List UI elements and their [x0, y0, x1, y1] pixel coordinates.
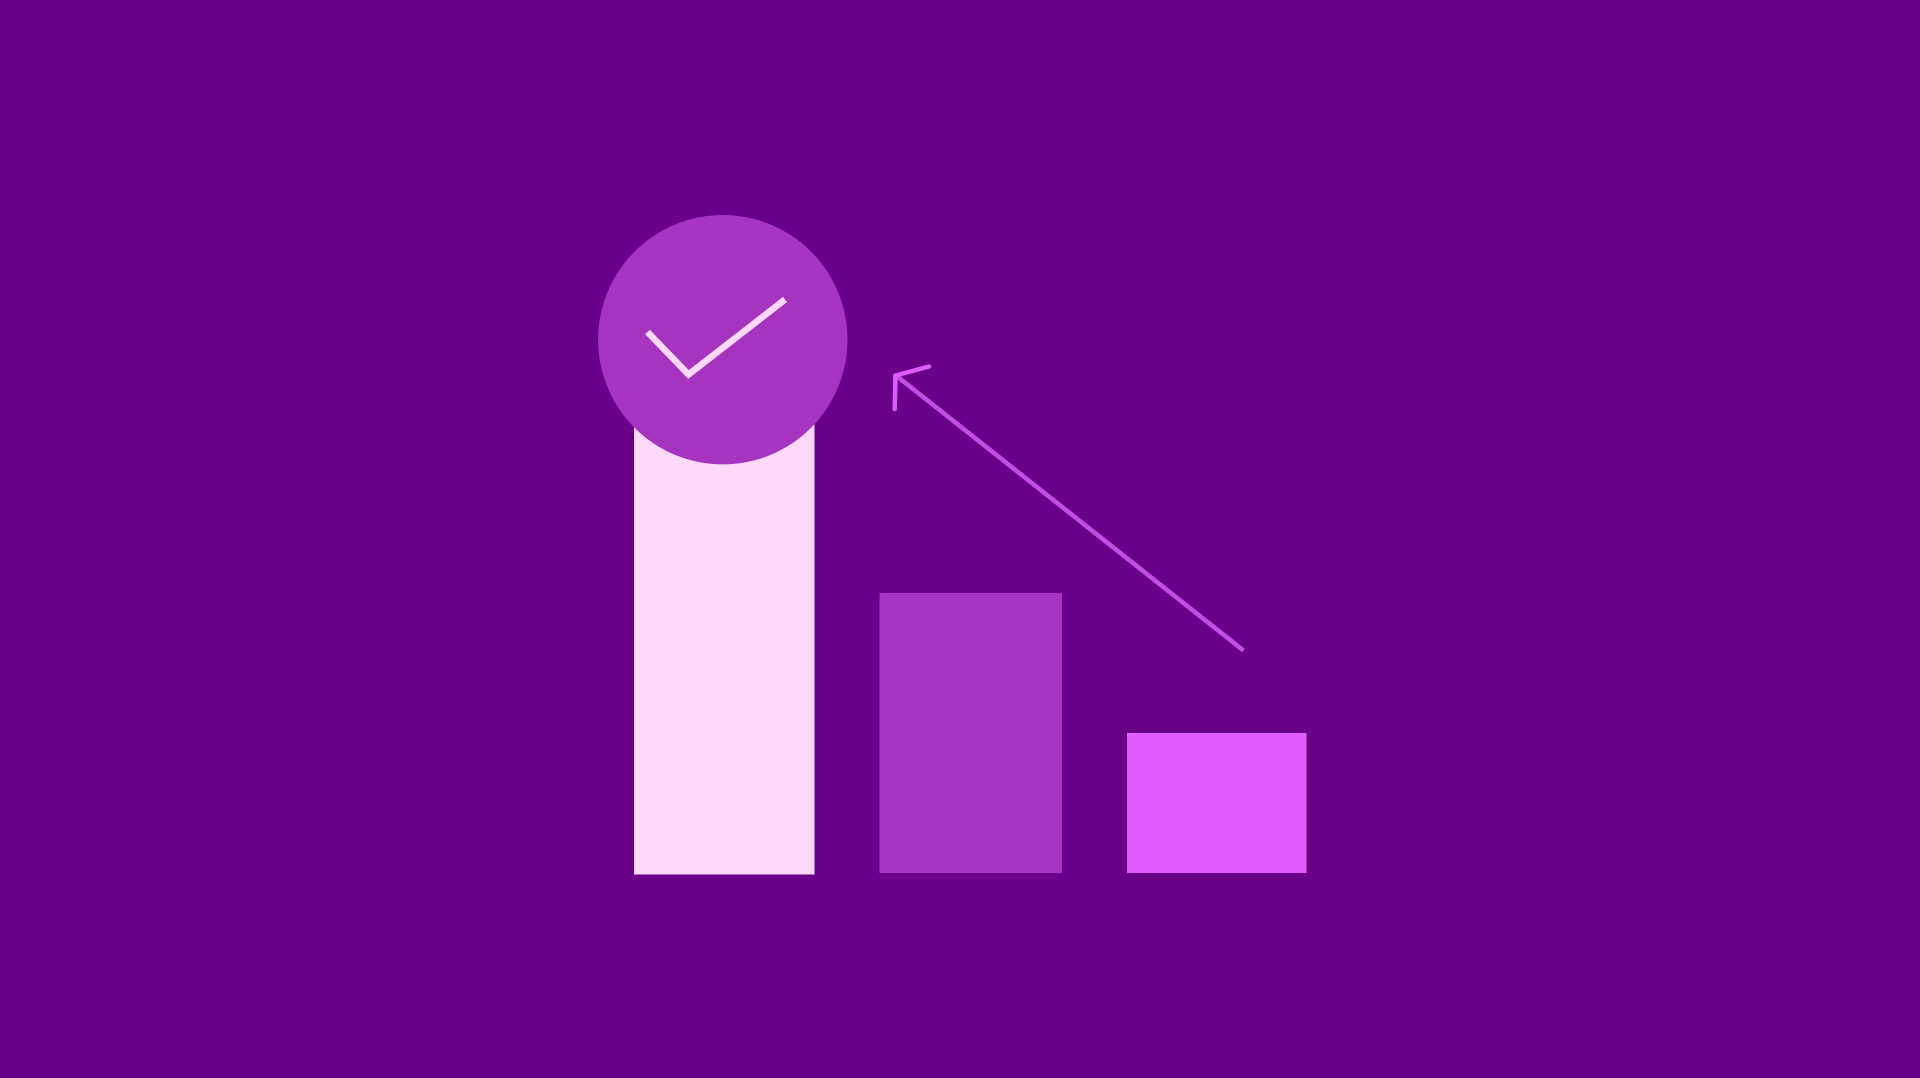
- bar: tall light pink: [634, 400, 814, 874]
- badge circle: [598, 215, 848, 464]
- bar: medium purple: [880, 593, 1062, 873]
- check mark: [648, 300, 785, 374]
- arrow pointing up-left: [895, 366, 1244, 650]
- arrow head: [895, 366, 929, 409]
- bar: short bright violet: [1127, 733, 1306, 873]
- icon: check mark badge: [598, 215, 848, 464]
- arrow shaft: [896, 376, 1244, 650]
